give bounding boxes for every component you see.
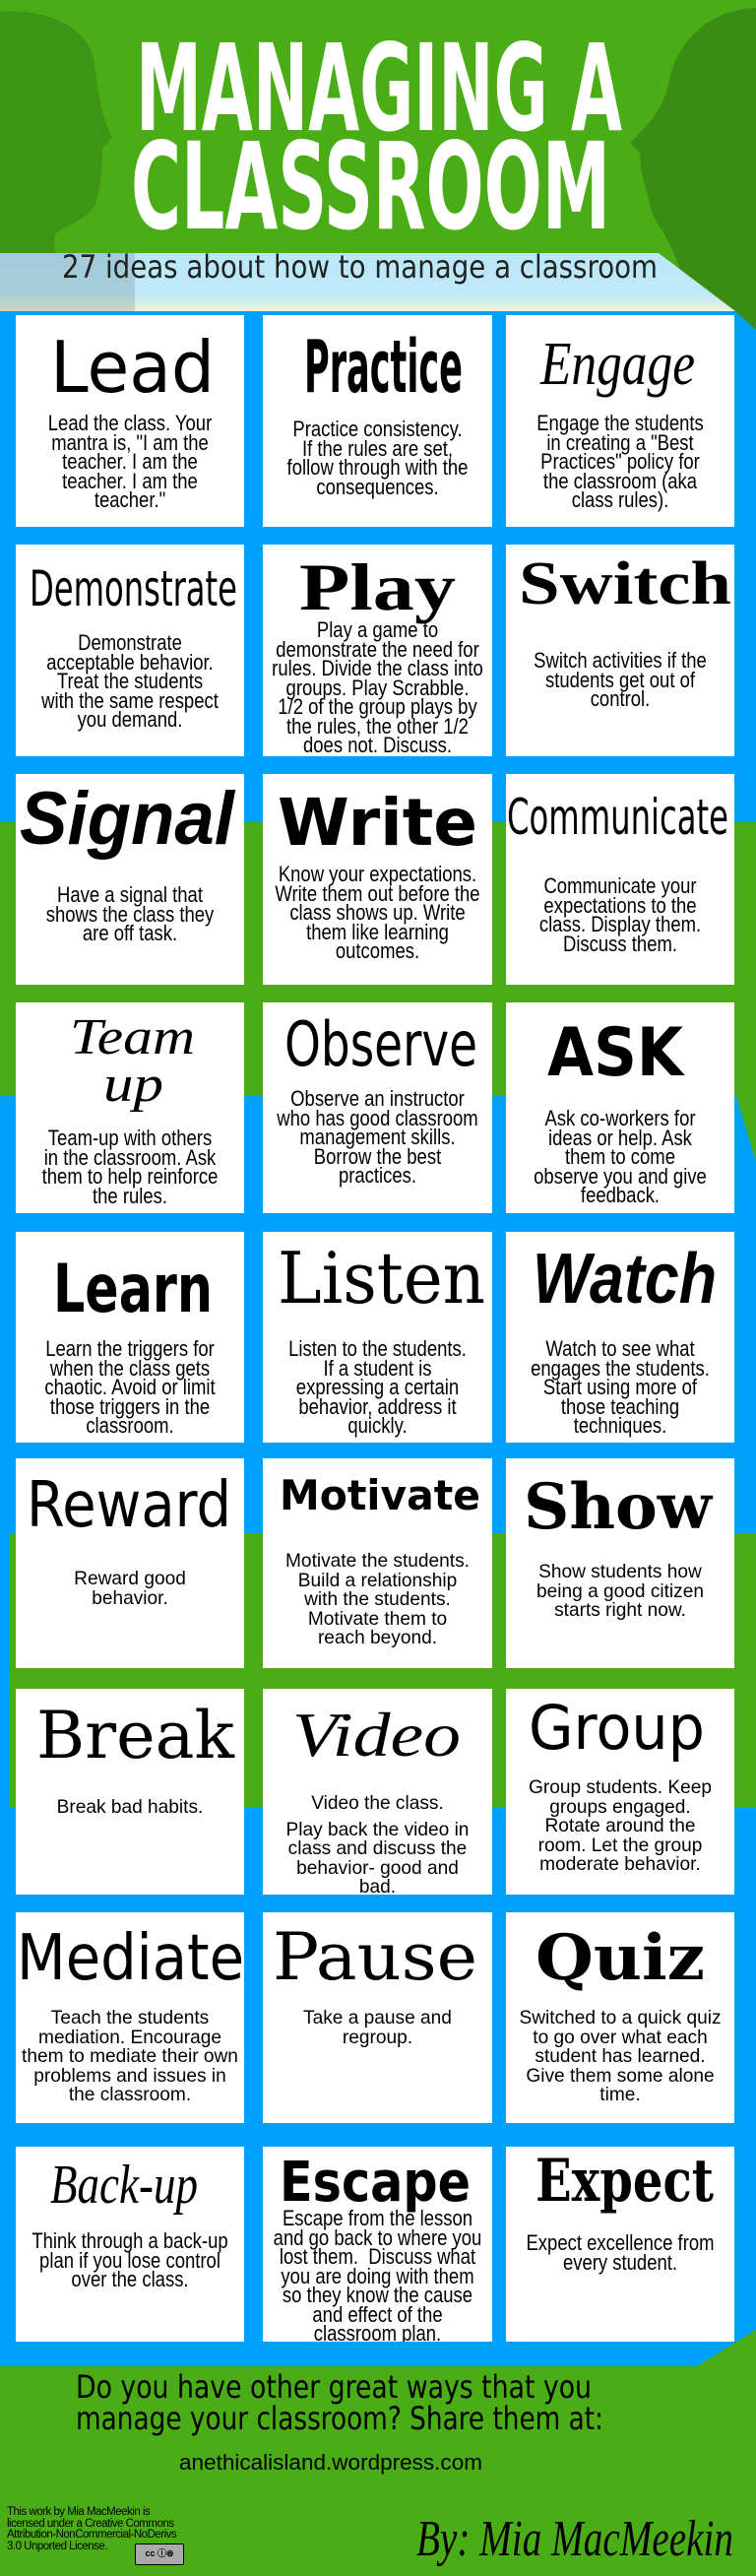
card text: Group: Rotate around the (544, 1815, 696, 1836)
footer question (0, 2368, 756, 2477)
footer question: manage your classroom? Share them at: (76, 2400, 603, 2437)
card text: Switch (534, 648, 707, 711)
card text: Learn: Learn the triggers for (45, 1336, 215, 1361)
card text: Engage: the classroom (aka (543, 469, 697, 492)
card text: Switch: students get out of (545, 668, 695, 691)
card text: ASK (534, 1106, 707, 1207)
card text: Play: groups. Play Scrabble. (286, 676, 469, 699)
card text: ASK: feedback. (581, 1183, 660, 1207)
card text: Motivate: Motivate the students. (285, 1550, 470, 1572)
card title: Engage: Engage (539, 331, 695, 398)
card: Learn (16, 1232, 244, 1443)
card text: Engage: Practices" policy for (540, 449, 700, 474)
card text: Quiz: Give them some alone (526, 2064, 715, 2086)
card text: Show (536, 1561, 704, 1621)
card title: Switch: Switch (519, 550, 731, 617)
card text: Engage (536, 411, 704, 512)
card text: Pause: Take a pause and (303, 2007, 452, 2029)
card text: Write: class shows up. Write (289, 900, 466, 925)
card text: Motivate: Build a relationship (298, 1570, 457, 1591)
card text: Listen: Listen to the students. (288, 1336, 467, 1361)
card: Video (263, 1689, 492, 1895)
card title: Show: Show (524, 1470, 714, 1544)
card text: Motivate: Motivate them to (308, 1607, 447, 1629)
card text: Practice: consequences. (316, 475, 439, 498)
card text: Motivate: with the students. (304, 1588, 451, 1610)
card: Mediate (16, 1912, 244, 2123)
card text: Quiz: time. (599, 2084, 641, 2105)
card text: Play: demonstrate the need for (276, 636, 479, 662)
card: Observe (263, 1002, 492, 1213)
card text: Demonstrate (41, 630, 219, 732)
card text: Group: room. Let the group (538, 1834, 702, 1855)
card title: Motivate: Motivate (280, 1471, 480, 1519)
card text: Back-up: plan if you lose control (39, 2247, 220, 2273)
card text: Video: class and discuss the (288, 1837, 467, 1859)
card text: Pause (236, 2009, 519, 2047)
license text: licensed under a Creative Commons (7, 2518, 174, 2530)
card text: Listen: quickly. (347, 1413, 408, 1438)
card text: Watch: those teaching (561, 1394, 679, 1418)
card text: Video (236, 1794, 519, 1897)
card text: Communicate: Communicate your (543, 873, 697, 898)
card text: Mediate (0, 2009, 271, 2105)
card title: Write: Write (278, 785, 477, 861)
card text: Engage: Engage the students (536, 411, 704, 435)
card text: Watch: engages the students. (531, 1355, 710, 1381)
card text: Practice (287, 417, 468, 498)
card text: Write: them like learning (306, 920, 449, 943)
card text: Observe: Borrow the best (314, 1144, 441, 1168)
card text: ASK: Ask co-workers for (544, 1106, 696, 1130)
card text: Video: behavior- good and (296, 1857, 459, 1879)
card text: Write: outcomes. (336, 938, 419, 963)
card text: ASK: them to come (565, 1144, 675, 1169)
card text: Learn: those triggers in the (50, 1394, 210, 1418)
card: Quiz (506, 1912, 734, 2123)
card text: Write: Write them out before the (275, 880, 480, 906)
card title: Video: Video (292, 1700, 461, 1770)
card text: Watch: Start using more of (543, 1375, 697, 1399)
card: Signal (16, 774, 244, 985)
card: Reward (16, 1458, 244, 1668)
card text: Signal: shows the class they (46, 902, 214, 926)
card text: Motivate: reach beyond. (318, 1627, 437, 1648)
card text: ASK: observe you and give (534, 1164, 707, 1188)
card: Write (263, 774, 492, 985)
card text: Lead: teacher. I am the (62, 449, 198, 474)
card text: Write (275, 862, 480, 963)
card: Play (263, 545, 492, 756)
card text: Video: Video the class. Play back the video in (286, 1792, 469, 1839)
card text: Expect (499, 2233, 741, 2272)
card text: Demonstrate: you demand. (78, 707, 182, 732)
title (131, 19, 622, 257)
card text: Escape: Escape from the lesson (283, 2206, 472, 2230)
card text: Team up: the rules. (93, 1184, 167, 1207)
card text: Reward: behavior. (92, 1587, 168, 1609)
card text: Learn: chaotic. Avoid or limit (44, 1375, 216, 1399)
card text: Communicate (539, 873, 701, 955)
card: Demonstrate (16, 545, 244, 756)
card text: Team up (41, 1126, 218, 1207)
card text: Escape: and effect of the (312, 2302, 443, 2326)
card text: Switch: control. (591, 686, 650, 711)
card: ASK (506, 1002, 734, 1213)
card: Communicate (506, 774, 734, 985)
card text: Group (479, 1778, 756, 1875)
license text (7, 2507, 204, 2553)
card: Engage (506, 315, 734, 527)
card: Motivate (263, 1458, 492, 1668)
card text: Lead: teacher. I am the (62, 469, 198, 492)
card text: Play: Play a game to (317, 617, 438, 642)
card text: Team up: in the classroom. Ask (44, 1144, 216, 1170)
card text: ASK: ideas or help. Ask (548, 1125, 692, 1150)
card: Group (506, 1689, 734, 1895)
card title: Team up: Team (70, 1009, 195, 1065)
card text: Mediate: them to mediate their own (22, 2045, 238, 2067)
card title: Pause: Pause (273, 1919, 477, 1995)
card text: Break: Break bad habits. (57, 1796, 203, 1818)
card text: Communicate: class. Display them. (539, 912, 701, 936)
card text: Demonstrate: with the same respect (41, 687, 219, 713)
card text: Observe: practices. (339, 1163, 416, 1188)
card text: Mediate: Teach the students (51, 2007, 209, 2029)
card text: Mediate: the classroom. (69, 2084, 191, 2105)
card text: Practice: Practice consistency. (292, 417, 463, 441)
footer question: Do you have other great ways that you (76, 2368, 592, 2406)
card text: Back-up (9, 2231, 251, 2288)
card: Expect (506, 2147, 734, 2342)
card text: Listen (288, 1336, 467, 1438)
card text: Observe: who has good classroom (277, 1105, 478, 1130)
card title: Play: Play (299, 549, 456, 624)
card: Switch (506, 545, 734, 756)
card text: Escape: and go back to where you (274, 2225, 481, 2249)
card text: Pause: regroup. (343, 2027, 412, 2048)
subtitle: 27 ideas about how to manage a classroom (62, 248, 658, 286)
card text: Mediate: mediation. Encourage (38, 2027, 221, 2048)
card text: Play: the rules, the other 1/2 (286, 713, 469, 739)
card text: Back-up: over the class. (71, 2267, 189, 2291)
card text: Team up: them to help reinforce (42, 1164, 218, 1189)
card text: Back-up: Think through a back-up (32, 2228, 228, 2253)
license text: Attribution-NonCommercial-NoDerivs (7, 2529, 176, 2541)
card text: Communicate: Discuss them. (563, 932, 677, 955)
card: Team up (16, 1002, 244, 1213)
card text: Quiz: to go over what each (533, 2027, 708, 2048)
card title: Escape: Escape (280, 2151, 471, 2215)
card title: Lead: Lead (50, 326, 215, 409)
card title: Signal: Signal (20, 777, 236, 861)
card text: Show: starts right now. (554, 1599, 686, 1621)
card text: Engage: in creating a "Best (546, 429, 694, 455)
card text: Lead: teacher." (94, 487, 165, 512)
icon: cc badge (135, 2544, 184, 2565)
card text: Quiz (479, 2009, 756, 2105)
card text: Engage: class rules). (572, 487, 668, 512)
card text: Watch (531, 1336, 710, 1438)
card: Back-up (16, 2147, 244, 2342)
card: Watch (506, 1232, 734, 1443)
card title: Break: Break (36, 1698, 235, 1773)
card title: Team up (70, 1009, 195, 1113)
card text: Group: moderate behavior. (539, 1853, 701, 1875)
card text: Signal: Have a signal that (57, 882, 203, 907)
card text: Listen: behavior, address it (298, 1394, 457, 1418)
card text: Learn: when the class gets (50, 1355, 210, 1381)
card text: Group: groups engaged. (549, 1796, 691, 1818)
card: Escape (263, 2147, 492, 2342)
card text: Learn: classroom. (86, 1413, 174, 1438)
card text: Signal (46, 882, 215, 945)
icon: cc badge: cc ⓘ⊜ (145, 2548, 174, 2558)
card: Pause (263, 1912, 492, 2123)
card text: Escape: so they know the cause (283, 2283, 472, 2307)
card: Show (506, 1458, 734, 1668)
card text: Show: being a good citizen (536, 1579, 704, 1601)
card title: Quiz: Quiz (536, 1921, 705, 1995)
card text: Observe: Observe an instructor (290, 1086, 465, 1111)
card: Practice (263, 315, 492, 527)
card text: Escape (256, 2209, 499, 2344)
card text: Watch: techniques. (574, 1413, 666, 1438)
card text: Demonstrate: Treat the students (57, 669, 203, 693)
card text: Signal: are off task. (83, 921, 177, 945)
card text: Motivate (285, 1550, 470, 1648)
card text: Demonstrate: Demonstrate (78, 630, 182, 655)
url: anethicalisland.wordpress.com (179, 2450, 482, 2475)
card title: Back-up: Back-up (50, 2155, 198, 2216)
license text: 3.0 Unported License. (7, 2541, 107, 2552)
card text: Observe: management skills. (299, 1125, 456, 1149)
card text: Reward (74, 1568, 186, 1609)
card text: Escape: lost them. Discuss what (280, 2244, 475, 2269)
license text: This work by Mia MacMeekin is (7, 2506, 150, 2518)
card text: Play: rules. Divide the class into (272, 656, 483, 680)
card text: Observe (277, 1086, 478, 1188)
card text: Listen: If a student is (324, 1355, 431, 1381)
card text: Team up: Team-up with others (48, 1126, 212, 1150)
card text: Demonstrate: acceptable behavior. (46, 650, 214, 674)
card text: Quiz: Switched to a quick quiz (519, 2007, 722, 2029)
card text: Learn (44, 1336, 216, 1438)
card text: Write: Know your expectations. (279, 862, 476, 886)
card text: Mediate: problems and issues in (33, 2064, 226, 2086)
card text: Play: 1/2 of the group plays by (278, 694, 477, 719)
card: Lead (16, 315, 244, 527)
card text: Quiz: student has learned. (535, 2045, 706, 2067)
card text: Practice: follow through with the (287, 455, 468, 480)
card text: Watch: Watch to see what (545, 1336, 695, 1361)
card title: ASK: ASK (547, 1014, 685, 1092)
card text: Group: Group students. Keep (529, 1776, 712, 1798)
card text: Reward: Reward good (74, 1568, 186, 1589)
card text: Expect: Expect excellence from (526, 2230, 715, 2255)
card: Listen (263, 1232, 492, 1443)
card text: Lead: Lead the class. Your (48, 411, 212, 435)
card title: Team up: up (103, 1057, 163, 1113)
card text: Lead: mantra is, "I am the (51, 429, 209, 455)
card title: Group: Group (529, 1692, 705, 1764)
card text: Lead (48, 411, 212, 512)
card text: Listen: expressing a certain (296, 1375, 459, 1399)
card text: Escape: you are doing with them (281, 2263, 474, 2288)
card text: Practice: If the rules are set, (302, 435, 453, 461)
card text: Switch: Switch activities if the (534, 648, 707, 673)
card: Break (16, 1689, 244, 1895)
card text: Expect: every student. (563, 2249, 677, 2275)
card text: Play (272, 617, 483, 756)
card text: Show: Show students how (538, 1561, 702, 1582)
card text: Communicate: expectations to the (543, 892, 697, 918)
